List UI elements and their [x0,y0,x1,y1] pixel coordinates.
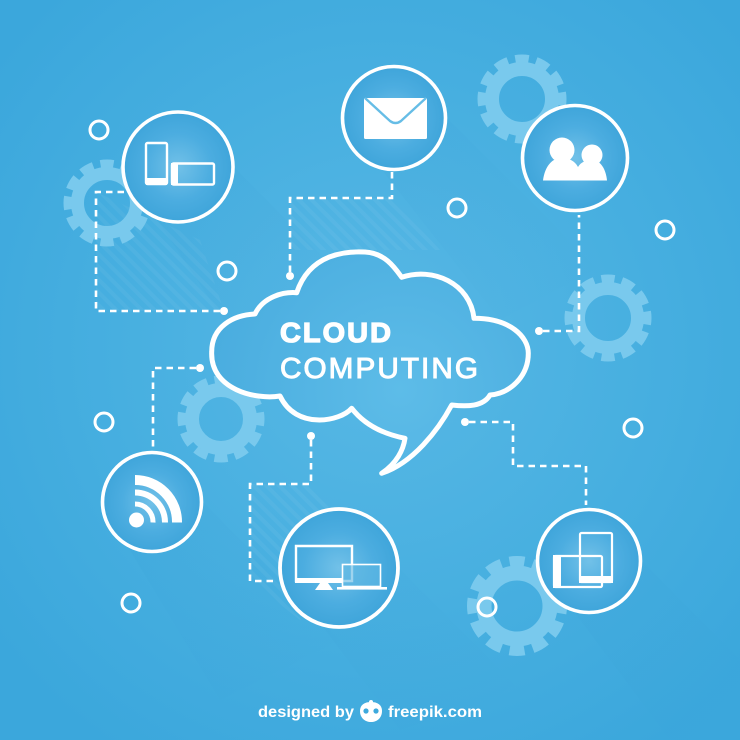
node: desktop and laptop [280,509,398,627]
small rings [90,121,674,616]
connector end dots [196,272,543,440]
gear: top centre [482,59,562,139]
icon: envelope [364,98,427,139]
icon: wifi signal [129,480,177,528]
icon: monitor and laptop [295,546,387,590]
footer credit [258,700,482,722]
node: wifi [102,452,202,552]
icon: overlapping tablets [553,533,613,588]
gear: bottom right [472,562,562,650]
dashed connectors [96,172,586,581]
node: email [342,66,446,170]
title: cloud computing: COMPUTING [280,353,480,385]
title: cloud computing [280,317,480,385]
icon: phone and tablet [146,143,214,185]
long shadows [96,65,740,740]
node: mobile devices [123,112,233,222]
gear: top left [68,164,146,242]
footer credit: designed by [258,704,354,721]
footer credit: freepik.com [388,704,482,721]
icon: two people [543,138,607,180]
gear: right [569,279,647,357]
icon: freepik robot [360,700,382,722]
node: tablets [538,510,640,612]
speech cloud [212,252,528,473]
title: cloud computing: CLOUD [280,317,393,348]
node: people [522,106,628,210]
gear: left middle [182,380,260,458]
